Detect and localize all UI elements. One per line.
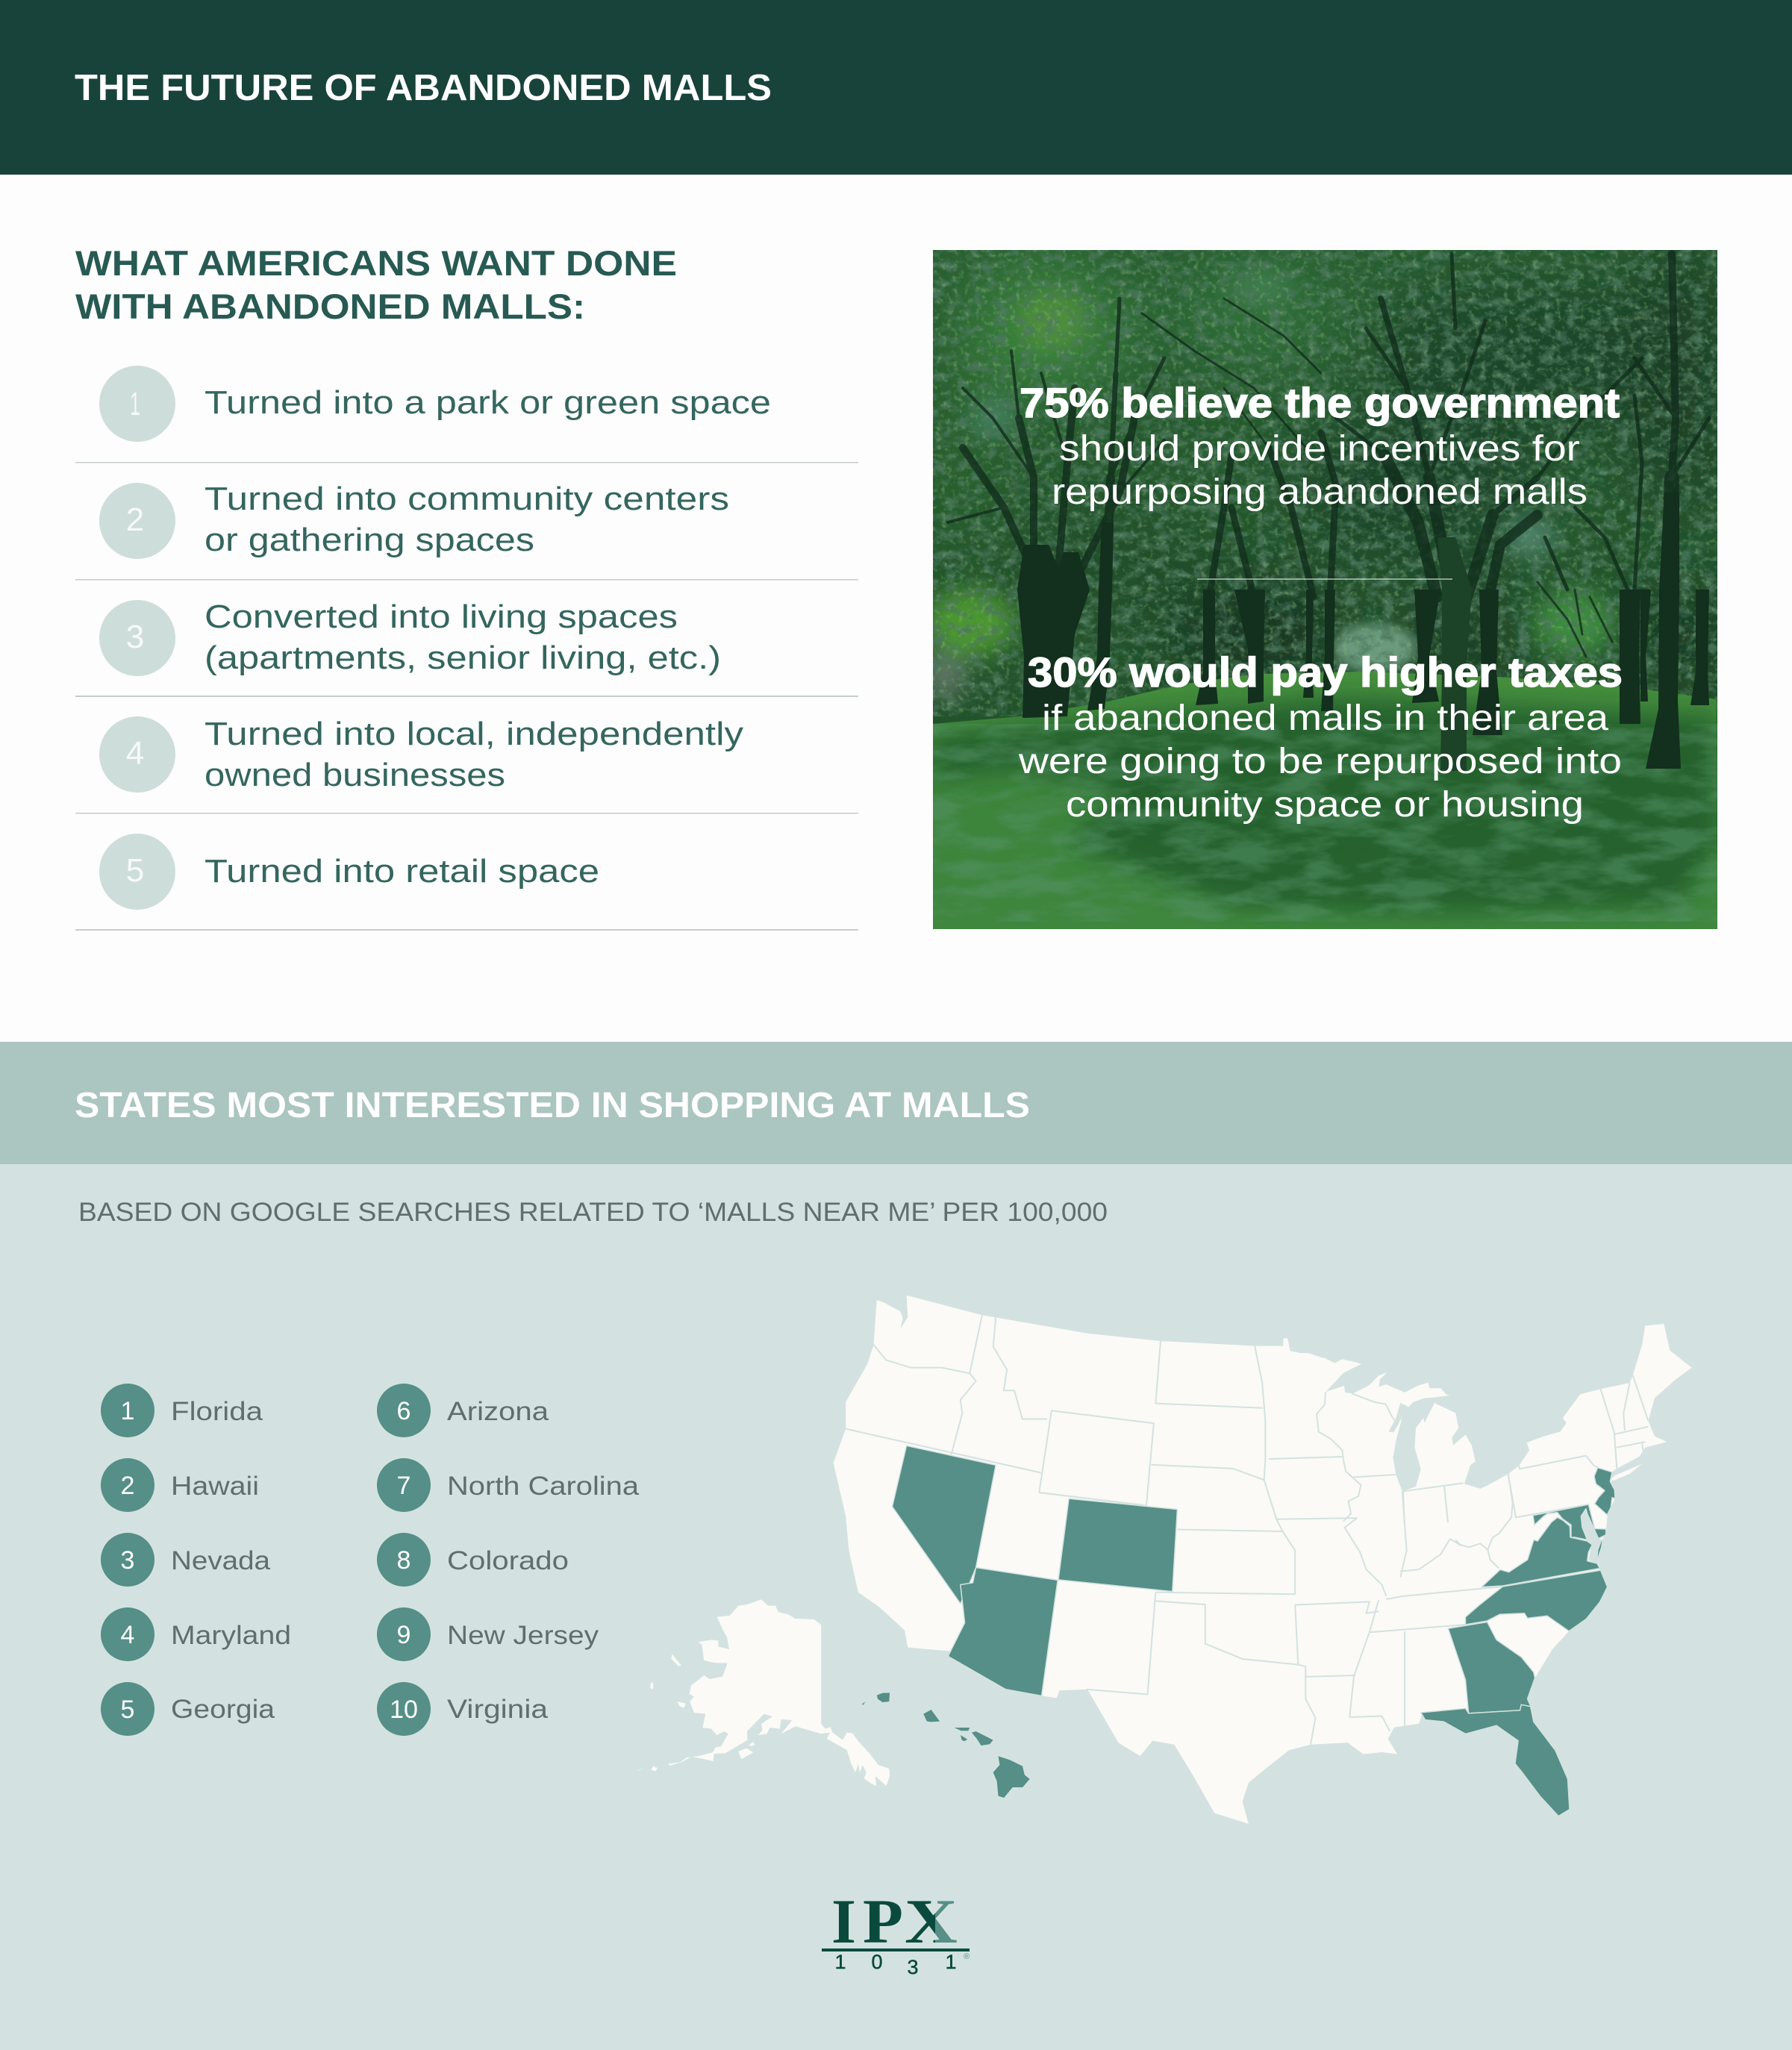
state: Virginia (1482, 1517, 1599, 1587)
Ohio and Pennsylvania borders (1455, 1474, 1513, 1550)
panel: what Americans want (75, 243, 858, 931)
map: Alaska (635, 1599, 890, 1786)
rank 3: Nevada (171, 1546, 271, 1575)
statistic: 30 percent (1018, 649, 1623, 825)
heading (75, 243, 677, 326)
rank 5: Georgia (171, 1695, 275, 1724)
list item 1: 1 (130, 386, 140, 422)
state: Colorado (1058, 1499, 1177, 1592)
subheading: BASED ON GOOGLE SEARCHES RELATED TO ‘MALLS NEAR ME’ PER 100,000 (78, 1198, 1108, 1227)
list item 2: 2 (126, 501, 144, 538)
branches (948, 254, 1709, 657)
rank 2 (101, 1458, 259, 1512)
rank 3: 3 (121, 1546, 134, 1575)
list item 2 (75, 481, 858, 581)
title: THE FUTURE OF ABANDONED MALLS (75, 68, 772, 108)
logo: IPX 1031: X (905, 1887, 958, 1957)
rank 4: Maryland (171, 1621, 291, 1650)
rank 2: 2 (121, 1472, 134, 1500)
rank 3 (101, 1533, 271, 1587)
rank 7: North Carolina (447, 1472, 640, 1501)
list item 5: Turned into retail space (205, 853, 599, 890)
state: Georgia (1448, 1622, 1535, 1713)
Great Lakes region borders (1269, 1392, 1464, 1522)
logo: IPX 1031: I (831, 1887, 856, 1957)
state: Maryland (1533, 1504, 1606, 1540)
rank 5: 5 (121, 1696, 134, 1724)
list item 3: Converted into living spaces (205, 599, 678, 635)
list item 4: 4 (126, 735, 144, 772)
map: Hawaii (862, 1693, 1030, 1798)
rank 2: Hawaii (171, 1472, 259, 1501)
rank 8: 8 (397, 1546, 410, 1575)
rank 7: 7 (397, 1472, 410, 1500)
section background (0, 1164, 1792, 2050)
statistic: 30 percent: community space or housing (1066, 785, 1584, 825)
rank 10: Virginia (447, 1695, 549, 1724)
rank 6: 6 (397, 1397, 410, 1425)
forest illustration (911, 231, 1739, 929)
state: Arizona (948, 1568, 1058, 1696)
rank 9 (377, 1607, 599, 1661)
rank 5 (101, 1682, 275, 1736)
rank 8 (377, 1533, 569, 1587)
Long Island (1608, 1464, 1642, 1481)
list item 3: (apartments, senior living, etc.) (205, 640, 721, 676)
rank 1 (101, 1384, 263, 1437)
list item 3: 3 (126, 619, 144, 655)
list item 4: owned businesses (205, 757, 505, 793)
foliage texture (933, 250, 1717, 716)
statistic: 75 percent: should provide incentives for (1059, 429, 1580, 469)
Chesapeake Bay (1581, 1509, 1602, 1565)
mid-Atlantic states (1455, 1456, 1642, 1587)
logo: IPX 1031: P (863, 1887, 903, 1957)
header band (0, 0, 1792, 175)
map: contiguous United States (834, 1296, 1692, 1824)
rank 4: 4 (121, 1621, 134, 1649)
rank 10 (377, 1682, 549, 1736)
state: North Carolina (1466, 1570, 1608, 1631)
rank 1: Florida (171, 1397, 263, 1426)
lawn shadows (933, 698, 1717, 914)
tree trunks (1017, 493, 1709, 771)
rank 6 (377, 1384, 549, 1437)
canopy tones (911, 231, 1739, 687)
logo: IPX 1031: 1 (834, 1951, 846, 1973)
list item 1: Turned into a park or green space (205, 384, 771, 421)
panel: forest photo with statistics (911, 231, 1739, 929)
list item 5: 5 (126, 852, 144, 889)
logo: IPX 1031: ® (964, 1952, 970, 1961)
heading: WHAT AMERICANS WANT DONE (75, 243, 677, 283)
list item 4 (75, 716, 858, 813)
legend: ranked states (101, 1384, 640, 1736)
logo: IPX 1031: 1 (945, 1951, 957, 1973)
list item 1 (75, 366, 858, 463)
heading: WITH ABANDONED MALLS: (75, 287, 585, 326)
list item 5 (75, 834, 858, 931)
rank 8: Colorado (447, 1546, 569, 1575)
rank 1: 1 (121, 1397, 134, 1425)
rank 6: Arizona (447, 1397, 549, 1426)
state: New Jersey (1594, 1468, 1615, 1515)
Virginia eastern shore (1598, 1540, 1602, 1557)
rank 9: 9 (397, 1621, 410, 1649)
logo: IPX 1031 (822, 1887, 970, 1978)
logo: IPX 1031: 3 (907, 1956, 919, 1978)
list item 2: Turned into community centers (205, 481, 729, 517)
statistic: 30 percent: were going to be repurposed into (1018, 742, 1622, 781)
state borders (845, 1315, 1648, 1745)
statistic: 75 percent: repurposing abandoned malls (1052, 472, 1587, 512)
logo: IPX 1031: 0 (871, 1951, 883, 1973)
statistic: 30 percent: if abandoned malls in their area (1042, 699, 1608, 738)
rank 7 (377, 1458, 640, 1512)
list item 4: Turned into local, independently (205, 716, 743, 752)
list item 2: or gathering spaces (205, 522, 534, 558)
state: Nevada (892, 1446, 996, 1604)
section header band (0, 1042, 1792, 1164)
rank 9: New Jersey (447, 1621, 599, 1650)
statistic: 75 percent (1020, 379, 1620, 512)
land silhouette (834, 1296, 1692, 1824)
statistic: 30 percent: 30% would pay higher taxes (1028, 649, 1623, 696)
pale bush (1334, 624, 1416, 672)
rank 10: 10 (390, 1696, 418, 1724)
list item 3 (75, 599, 858, 697)
state: Florida (1421, 1704, 1570, 1816)
rank 4 (101, 1607, 291, 1661)
statistic: 75 percent: 75% believe the government (1020, 379, 1620, 426)
section heading: STATES MOST INTERESTED IN SHOPPING AT MALLS (75, 1086, 1030, 1125)
lawn (933, 672, 1717, 929)
